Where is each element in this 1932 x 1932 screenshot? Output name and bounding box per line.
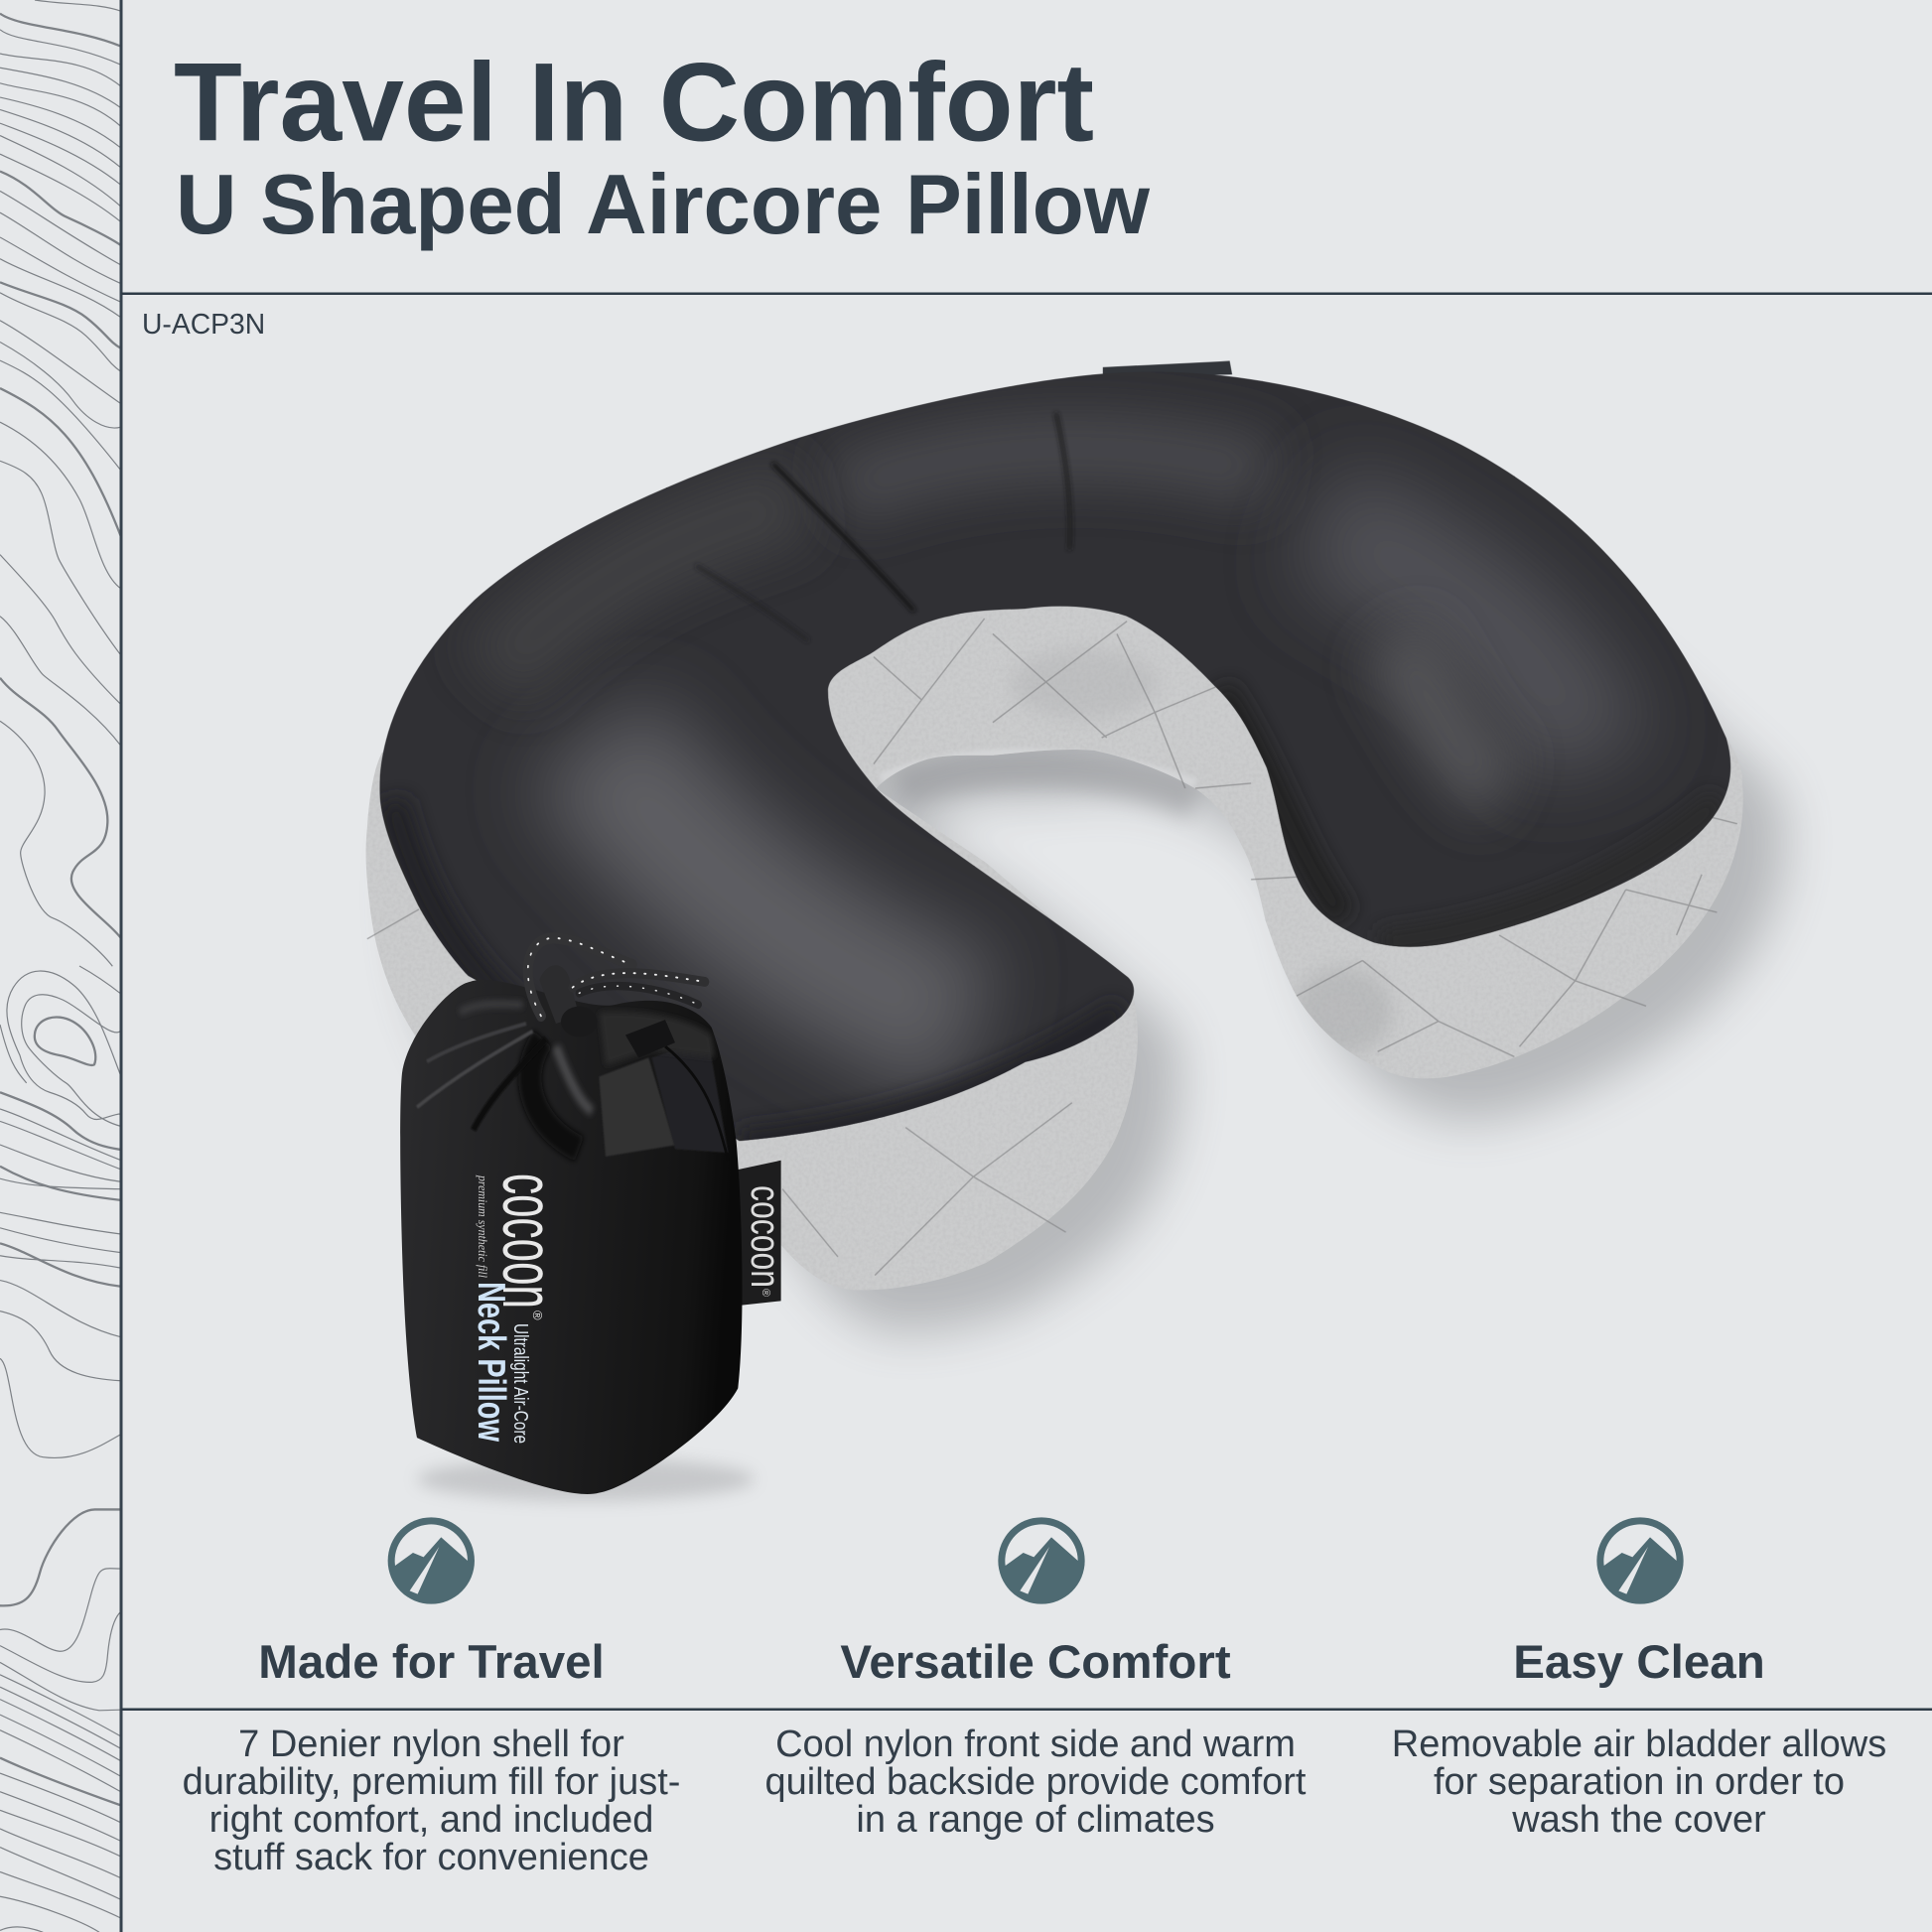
topographic contour strip <box>0 0 121 1932</box>
text block: Versatile Comfort: in a range of climates <box>856 1799 1215 1841</box>
text block: Easy Clean: Removable air bladder allows <box>1392 1724 1886 1765</box>
title: Travel In Comfort <box>174 40 1094 165</box>
pillow product image <box>357 361 1785 1332</box>
stuff sack shadow <box>417 1457 755 1501</box>
text block: Made for Travel: right comfort, and included <box>209 1799 653 1841</box>
pillow shadow <box>408 436 1785 1332</box>
text block: Versatile Comfort: Cool nylon front side and warm <box>775 1724 1296 1765</box>
model code: U-ACP3N <box>142 308 265 340</box>
text block: Made for Travel: stuff sack for convenience <box>213 1837 649 1878</box>
heading: Versatile Comfort: Versatile Comfort <box>840 1636 1231 1689</box>
top horizontal divider <box>121 292 1932 295</box>
text block: Easy Clean: wash the cover <box>1511 1799 1766 1841</box>
sack folds and ripstop panel <box>417 1004 728 1161</box>
sack fill note: premium synthetic fill <box>476 1174 490 1278</box>
side tag registered mark: ® <box>759 1289 771 1297</box>
vertical divider <box>119 0 123 1932</box>
bottom horizontal divider <box>121 1708 1932 1711</box>
text block: Made for Travel: durability, premium fill for just- <box>183 1761 680 1803</box>
top label tab <box>1103 361 1232 377</box>
nylon shell <box>379 372 1730 1141</box>
text block: Versatile Comfort: quilted backside provide comfort <box>765 1761 1307 1803</box>
fleece back <box>366 394 1743 1290</box>
icon: mountain badge 3 <box>1596 1517 1684 1604</box>
text block: Made for Travel: 7 Denier nylon shell for <box>238 1724 624 1765</box>
sack logo: cocoon <box>487 1173 568 1309</box>
fleece texture <box>884 637 1404 1062</box>
icon: mountain badge 2 <box>998 1517 1085 1604</box>
sack product name: Neck Pillow <box>470 1282 512 1442</box>
heading: Made for Travel: Made for Travel <box>258 1636 605 1689</box>
sack logo registered mark: ® <box>530 1311 545 1320</box>
drawstring cord <box>528 938 705 1016</box>
side tag logo: cocoon <box>743 1185 789 1288</box>
cord lock and strap <box>625 1020 675 1057</box>
text block: Easy Clean: for separation in order to <box>1434 1761 1845 1803</box>
sack body <box>400 980 743 1494</box>
shadow inside the pillow opening <box>899 769 1195 801</box>
heading: Easy Clean: Easy Clean <box>1513 1636 1765 1689</box>
shell highlights and creases <box>392 413 1719 1141</box>
quilt stitching <box>367 619 1737 1276</box>
subtitle: U Shaped Aircore Pillow <box>176 158 1151 252</box>
stuff sack <box>400 938 789 1494</box>
sack product line: Ultralight Air-Core <box>509 1323 531 1444</box>
icon: mountain badge 1 <box>388 1517 475 1604</box>
sack side tag <box>728 1161 781 1307</box>
